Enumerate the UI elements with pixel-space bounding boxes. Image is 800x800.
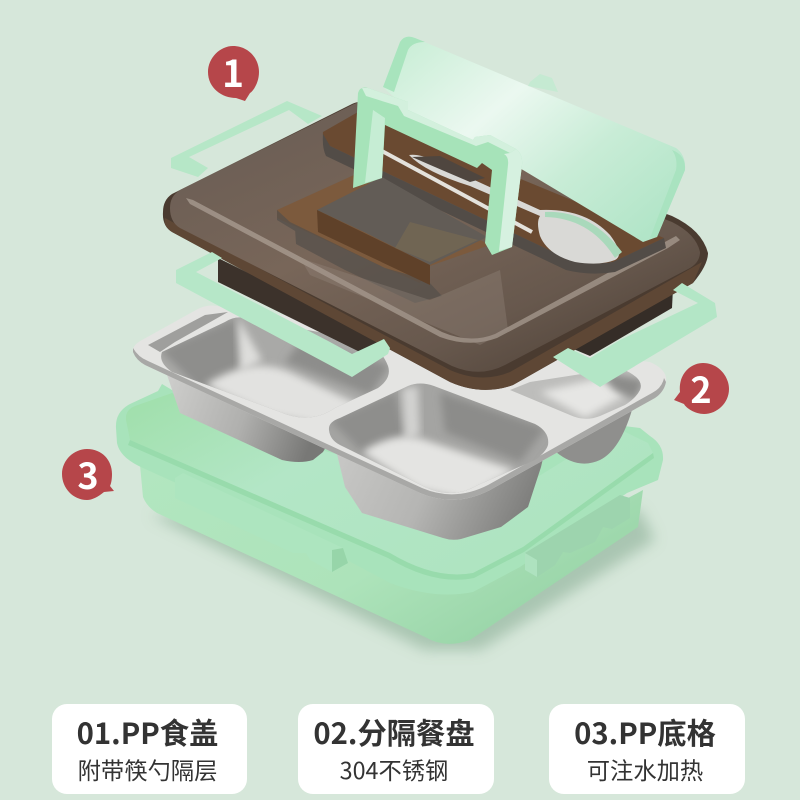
card 2 heading: 02.分隔餐盘 bbox=[313, 711, 475, 753]
marker 2 bbox=[674, 362, 729, 414]
chopsticks bbox=[380, 150, 532, 232]
tray wells undersides bbox=[166, 372, 330, 462]
card 2 description: 304不锈钢 bbox=[340, 752, 448, 786]
front-right lid handle bbox=[553, 283, 717, 387]
translucent lower reflection bbox=[300, 258, 508, 345]
card 3 heading: 03.PP底格 bbox=[574, 711, 716, 753]
steel divided tray bbox=[133, 306, 666, 540]
marker 3: 3 bbox=[77, 448, 99, 500]
handle right outer face bbox=[499, 149, 522, 251]
tray back rim groove bbox=[148, 312, 228, 352]
center storage tray bbox=[317, 177, 487, 265]
back-left lid handle bbox=[171, 101, 322, 177]
marker 1 bbox=[208, 44, 259, 101]
compartment left bbox=[161, 317, 389, 418]
marker 1: 1 bbox=[222, 44, 244, 98]
box body bbox=[140, 465, 643, 644]
cutlery compartment bbox=[323, 112, 664, 264]
spoon bbox=[409, 155, 622, 264]
compartment front bbox=[328, 384, 548, 493]
center recess bbox=[277, 175, 490, 283]
lid front brown band bbox=[165, 218, 702, 390]
marker 2: 2 bbox=[690, 362, 712, 414]
brown transparent lid bbox=[163, 102, 708, 390]
card 1 heading: 01.PP食盖 bbox=[77, 711, 218, 753]
card 1 description: 附带筷勺隔层 bbox=[78, 752, 217, 786]
marker 3 bbox=[62, 448, 114, 500]
box rim bbox=[116, 375, 663, 595]
card: PP lid bbox=[52, 704, 247, 794]
handle top face bbox=[362, 88, 516, 153]
box interior bbox=[126, 393, 653, 574]
compartment right bbox=[510, 371, 641, 419]
card: PP base bbox=[549, 704, 745, 794]
lid outer rim bbox=[163, 102, 708, 390]
card: divided tray bbox=[298, 704, 494, 794]
lid top face bbox=[170, 102, 700, 372]
base tray: green PP box bbox=[116, 375, 663, 650]
product illustration bbox=[62, 36, 729, 656]
plateau edge line bbox=[186, 198, 680, 343]
handle frame bbox=[353, 88, 522, 255]
inner rim highlight bbox=[128, 440, 654, 580]
front-left lid handle bbox=[176, 252, 390, 377]
clip: left latch bbox=[175, 473, 348, 572]
tray rim bbox=[133, 306, 666, 500]
card 3 description: 可注水加热 bbox=[587, 752, 703, 786]
handle left inner strip bbox=[365, 110, 385, 183]
fold-up carry handle bbox=[353, 88, 522, 255]
clip: right latch bbox=[525, 495, 630, 577]
flip-up cutlery cover bbox=[383, 37, 685, 242]
lid side seals bbox=[218, 258, 673, 358]
